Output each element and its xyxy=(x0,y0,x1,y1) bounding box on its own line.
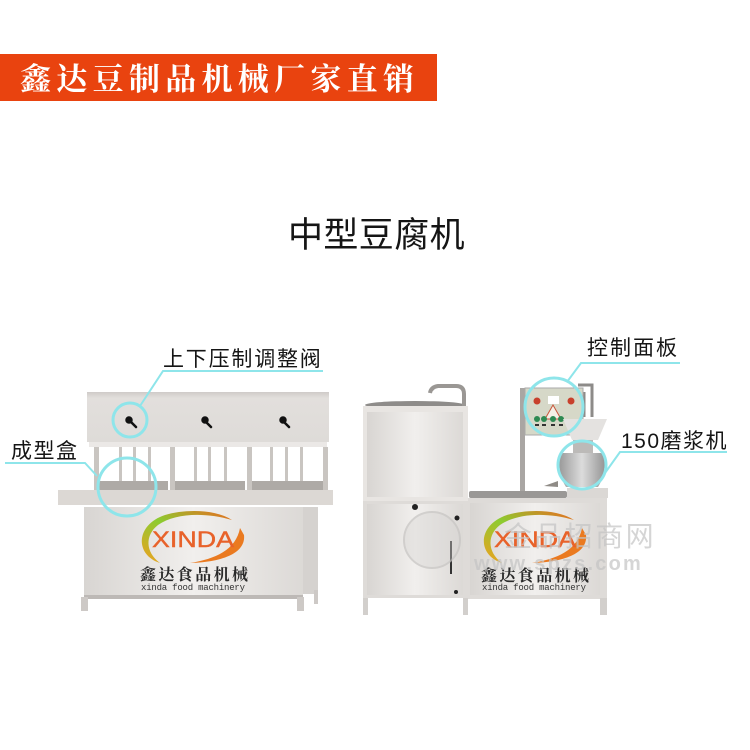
rear pipes xyxy=(578,385,592,417)
watermark: www.spzs.com xyxy=(473,553,643,575)
grinder neck xyxy=(573,439,593,453)
brand text: 鑫达食品机械 xyxy=(140,565,250,584)
label: valve: 上下压制调整阀 xyxy=(163,348,323,371)
platform xyxy=(567,488,608,498)
logo: XINDA xyxy=(152,527,234,552)
watermark: 金品招商网 xyxy=(504,521,656,552)
brand text: 鑫达食品机械 xyxy=(481,566,591,585)
cabinet xyxy=(84,507,303,597)
logo xyxy=(142,511,244,563)
title: 中型豆腐机 xyxy=(288,216,465,255)
door handle xyxy=(450,541,452,574)
machine: boiling tank and grinder xyxy=(363,385,608,615)
banner: 鑫达豆制品机械厂家直销 xyxy=(20,62,419,97)
door locks xyxy=(412,504,460,594)
callout: valve xyxy=(113,371,323,437)
pipe xyxy=(430,386,464,406)
basin xyxy=(469,491,567,498)
lower cabinet xyxy=(363,501,468,598)
brand text english: xinda food machinery xyxy=(141,583,246,593)
right cabinet xyxy=(468,498,607,599)
funnel xyxy=(563,419,607,440)
control panel xyxy=(525,388,583,435)
table xyxy=(58,490,333,505)
callout: forming box xyxy=(5,458,156,516)
banner xyxy=(0,54,437,101)
machine: forming press xyxy=(58,392,333,611)
label: control panel: 控制面板 xyxy=(587,337,679,360)
logo xyxy=(484,511,586,563)
logo: XINDA xyxy=(494,527,576,552)
label: grinder: 150磨浆机 xyxy=(621,430,728,453)
side panel xyxy=(303,507,318,594)
tank rim xyxy=(365,401,465,409)
valve handles xyxy=(126,418,289,427)
label: forming box: 成型盒 xyxy=(11,440,78,463)
callout: grinder xyxy=(558,441,727,489)
stand xyxy=(520,388,525,491)
press posts xyxy=(94,447,328,490)
tank xyxy=(363,406,468,501)
grinder bowl xyxy=(559,453,605,487)
watermark xyxy=(404,512,656,575)
spout xyxy=(544,481,558,487)
legs xyxy=(81,590,318,611)
callout: control panel xyxy=(525,363,680,436)
legs xyxy=(363,598,607,615)
top hood xyxy=(87,392,329,442)
brand text english: xinda food machinery xyxy=(482,583,587,593)
forming trays xyxy=(99,481,323,490)
